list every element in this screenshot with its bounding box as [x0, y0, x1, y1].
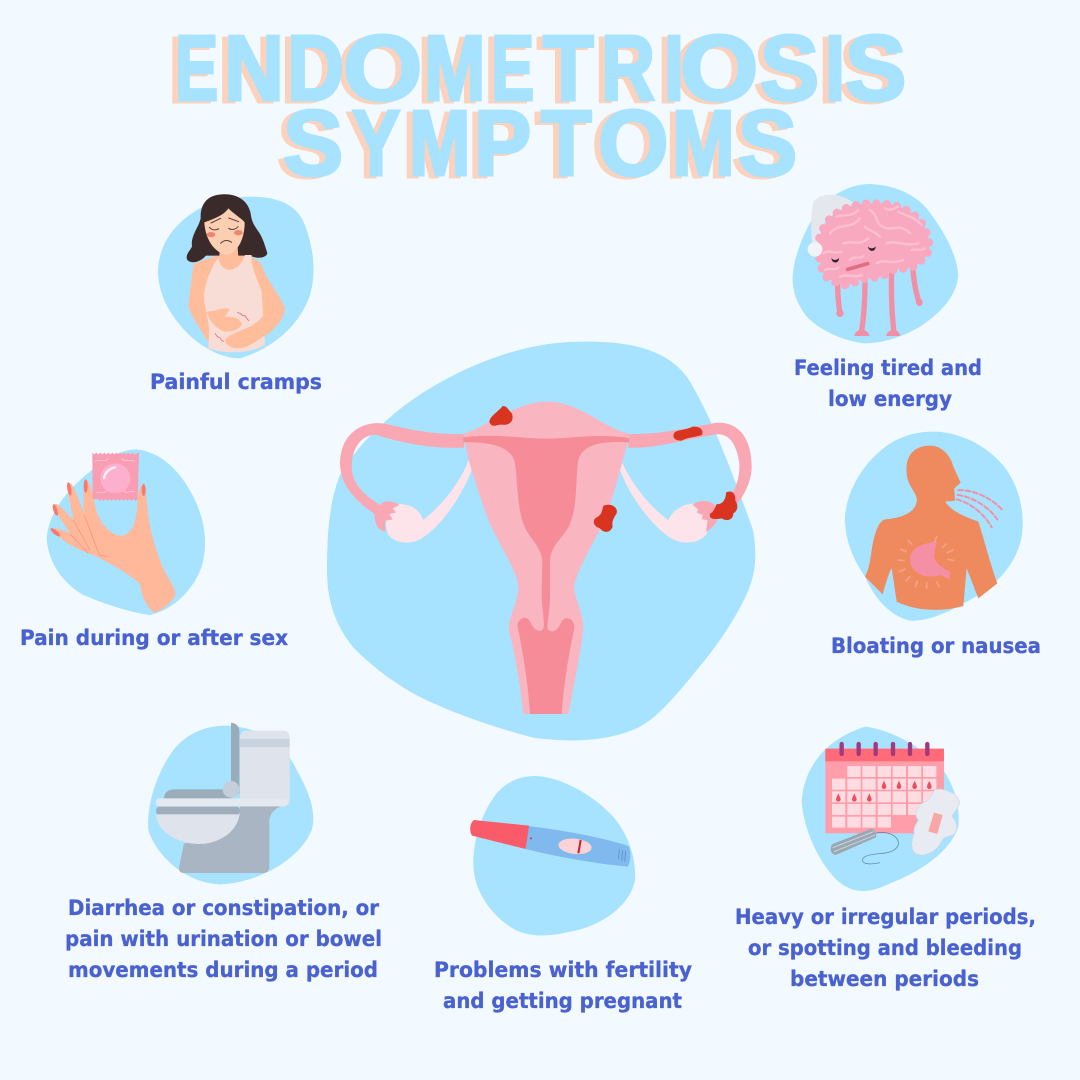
- title: T: [535, 93, 586, 197]
- eyes: [831, 246, 876, 262]
- label: pain with urination or bowel: [65, 927, 382, 951]
- title: E: [485, 18, 529, 122]
- label: Feeling tired and: [794, 356, 982, 380]
- title: Y: [352, 91, 400, 195]
- title: I: [819, 18, 839, 122]
- cheeks: [207, 230, 243, 237]
- title: [169, 16, 907, 197]
- central blue blob: [327, 342, 755, 740]
- title: N: [224, 16, 284, 120]
- title: I: [664, 16, 684, 120]
- title: M: [403, 93, 464, 197]
- label: Painful cramps: [150, 370, 322, 394]
- blob: [47, 449, 205, 615]
- nightcap pom-pom: [808, 242, 822, 257]
- title: E: [175, 16, 219, 120]
- label: Heavy or irregular periods,: [735, 905, 1036, 929]
- title: S: [845, 16, 907, 120]
- left fallopian tube: [340, 423, 464, 516]
- left fimbriae: [375, 501, 399, 532]
- panel: bloating: [831, 432, 1041, 658]
- label: [65, 896, 382, 982]
- blob: [845, 432, 1023, 621]
- panel: tired: [793, 184, 982, 411]
- panel: central uterus illustration: [327, 342, 755, 740]
- left ligament and ovary: [386, 458, 472, 543]
- toilet base: [179, 806, 282, 873]
- lesion: right tube: [673, 427, 703, 441]
- brain legs: [838, 253, 919, 333]
- pain marks: [215, 312, 249, 342]
- label: and getting pregnant: [443, 989, 682, 1013]
- label: movements during a period: [68, 958, 378, 982]
- tank top: [204, 255, 265, 352]
- closed seat: [164, 789, 232, 798]
- label: [735, 905, 1036, 991]
- title: O: [598, 91, 669, 195]
- panel: pain during sex: [20, 449, 288, 650]
- result line: [578, 840, 581, 853]
- right fimbriae: [693, 501, 718, 532]
- face: [204, 208, 245, 255]
- label: Problems with fertility: [434, 958, 692, 982]
- title: Y: [346, 93, 394, 197]
- nightcap: [811, 195, 855, 243]
- right ligament and ovary: [620, 462, 709, 543]
- label: between periods: [790, 967, 979, 991]
- title: E: [491, 16, 535, 120]
- test cap: [470, 820, 529, 849]
- lesion: right ovary: [710, 491, 737, 520]
- fingernails: [49, 479, 146, 538]
- breath dashes: [957, 490, 1002, 527]
- toilet illustration: [148, 723, 313, 884]
- title: N: [218, 18, 278, 122]
- title: P: [474, 91, 532, 195]
- title: T: [537, 18, 588, 122]
- small indicator: [530, 837, 532, 839]
- vaginal canal: [517, 618, 574, 714]
- title: D: [281, 18, 338, 122]
- rim: [156, 807, 240, 815]
- blood drops: [836, 781, 932, 802]
- right fallopian tube: [628, 423, 752, 504]
- bowl: [156, 814, 239, 844]
- title: E: [169, 18, 213, 122]
- label: [794, 356, 982, 411]
- blob: [158, 197, 314, 358]
- blob: [802, 727, 959, 891]
- test body: [526, 826, 630, 867]
- pad stripe: [928, 813, 943, 834]
- torso illustration: [845, 432, 1023, 621]
- condom ring: [100, 463, 130, 493]
- title: R: [595, 18, 649, 122]
- panel: bowel symptoms: [65, 723, 382, 982]
- title: O: [592, 93, 663, 197]
- panel: heavy periods: [735, 727, 1036, 991]
- condom packet: [92, 453, 139, 501]
- pregnancy test illustration: [470, 776, 635, 935]
- tampon: [831, 829, 876, 855]
- sanitary pad: [912, 789, 959, 855]
- finger creases: [70, 515, 108, 557]
- packet pattern: [95, 458, 135, 493]
- title: S: [760, 16, 819, 120]
- hands on abdomen: [207, 308, 242, 332]
- seat top: [156, 798, 288, 806]
- brain illustration: [793, 184, 958, 343]
- title: R: [601, 16, 655, 120]
- lesion: uterus side: [594, 505, 617, 532]
- title: M: [424, 16, 485, 120]
- title: T: [541, 91, 592, 195]
- label: [434, 958, 692, 1013]
- calendar rings: [842, 744, 927, 754]
- packet highlight: [104, 467, 115, 478]
- title: O: [336, 18, 416, 122]
- tank band: [240, 739, 290, 747]
- title: S: [839, 18, 901, 122]
- uterus anatomy: [340, 402, 752, 714]
- title: D: [287, 16, 344, 120]
- tank: [240, 731, 290, 806]
- arms and shoulders: [188, 253, 285, 348]
- title: S: [276, 93, 337, 197]
- brain wrinkles: [823, 207, 925, 277]
- woman illustration: [158, 194, 314, 358]
- blob: [473, 776, 635, 935]
- title: M: [409, 91, 470, 195]
- title: S: [732, 93, 791, 197]
- label: Bloating or nausea: [831, 634, 1041, 658]
- hand illustration: [47, 449, 205, 615]
- mouth: [848, 264, 868, 269]
- grip lines: [618, 849, 626, 862]
- label: Diarrhea or constipation, or: [68, 896, 380, 920]
- brain feet: [836, 299, 923, 336]
- stomach: [910, 542, 950, 579]
- title: S: [754, 18, 813, 122]
- calendar header: [825, 749, 944, 761]
- uterine cavity: [463, 436, 629, 628]
- hair: [187, 194, 267, 262]
- tampon stripes: [833, 832, 875, 852]
- blob: [148, 726, 313, 884]
- calendar page: [825, 749, 944, 833]
- panel: painful cramps: [150, 194, 322, 394]
- title: O: [342, 16, 422, 120]
- label: Pain during or after sex: [20, 626, 288, 650]
- stomach pain rays: [898, 537, 954, 588]
- title: T: [543, 16, 594, 120]
- facial features: [209, 218, 239, 243]
- title: I: [658, 18, 678, 122]
- result window: [558, 837, 592, 856]
- label: or spotting and bleeding: [748, 936, 1022, 960]
- title: O: [680, 16, 758, 120]
- raised lid: [231, 723, 239, 793]
- title: M: [672, 91, 734, 195]
- title: P: [468, 93, 526, 197]
- title: O: [674, 18, 752, 122]
- body silhouette: [865, 446, 997, 610]
- title: S: [282, 91, 343, 195]
- brain body: [818, 203, 929, 285]
- title: M: [666, 93, 728, 197]
- hand: [52, 480, 176, 613]
- label: low energy: [828, 387, 952, 411]
- title: S: [738, 91, 797, 195]
- blob: [793, 184, 958, 343]
- title: I: [825, 16, 845, 120]
- calendar illustration: [802, 727, 959, 891]
- uterus body: [463, 402, 630, 714]
- tampon string: [862, 832, 898, 864]
- calendar cells: [832, 766, 936, 828]
- hinge: [223, 781, 239, 798]
- lesion: top of uterus: [489, 406, 513, 426]
- neck: [219, 243, 238, 263]
- panel: fertility: [434, 776, 692, 1013]
- title: M: [418, 18, 479, 122]
